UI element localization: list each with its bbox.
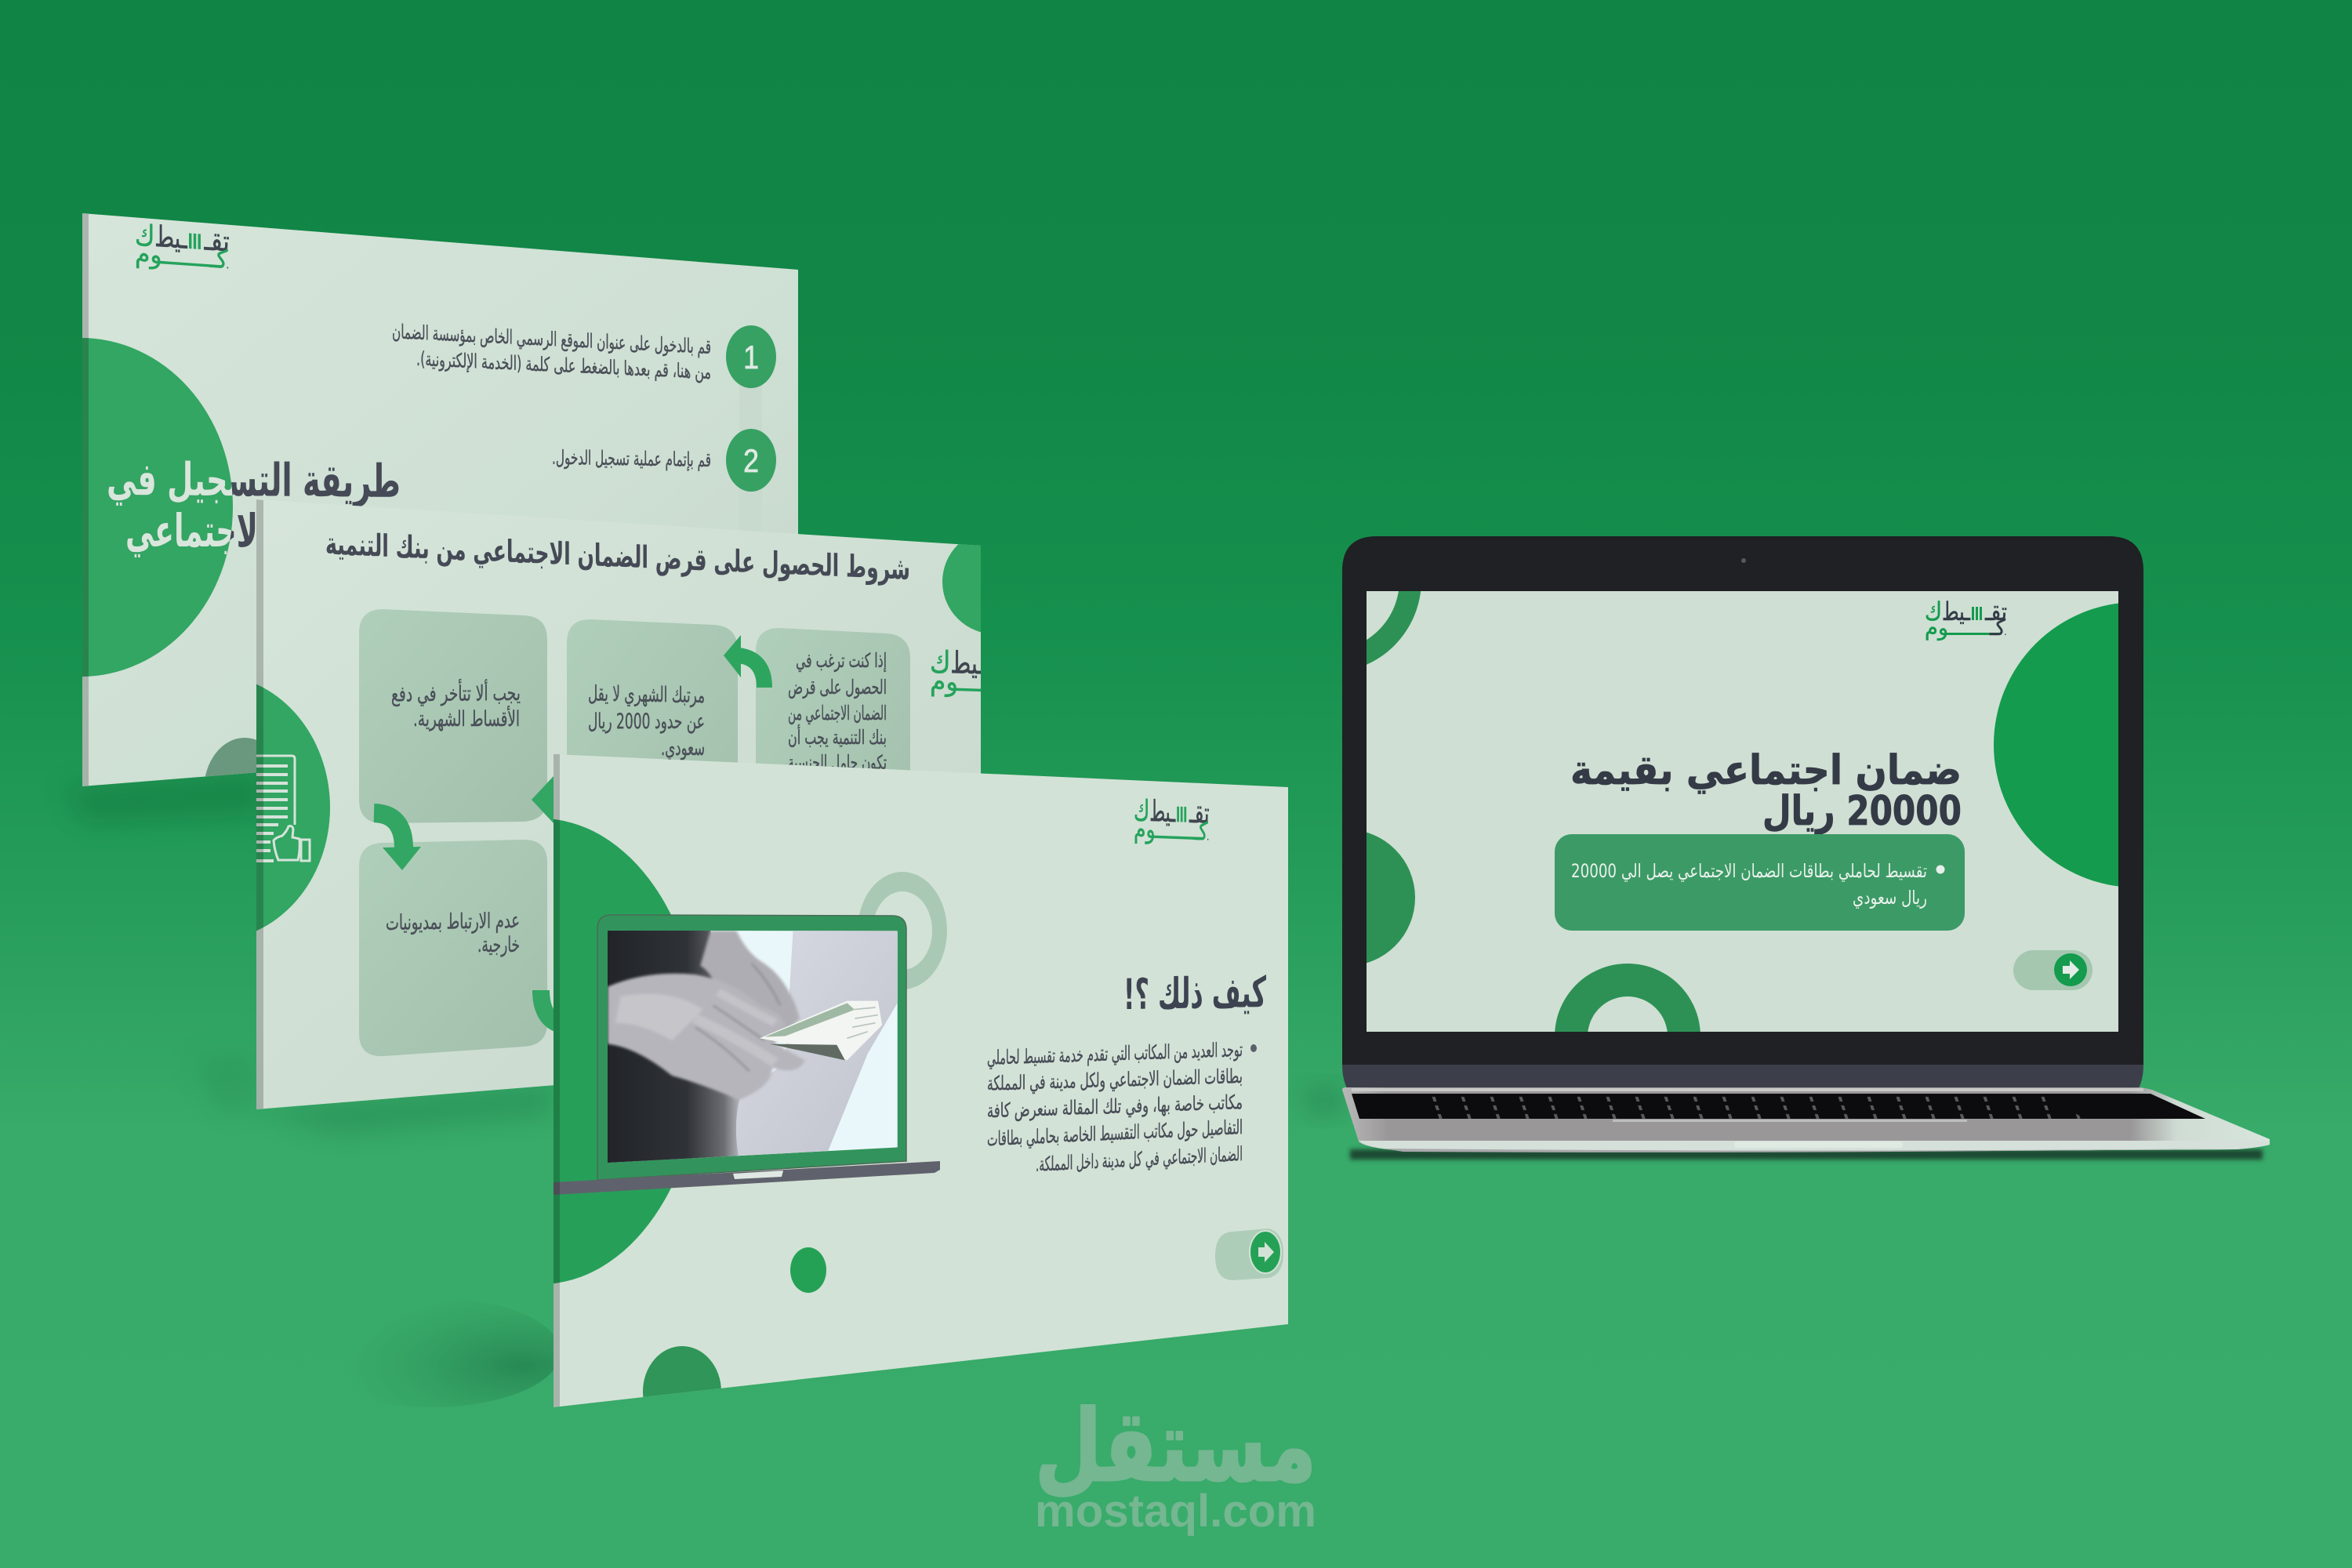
- shape: left circle: [1279, 829, 1415, 966]
- logo: ك: [1134, 793, 1149, 828]
- logo: ك: [135, 218, 154, 253]
- card: no debts: [359, 840, 547, 1056]
- slide 1 title: الضمان الاجتماعي: [125, 504, 381, 557]
- shape: left green circle: [554, 818, 671, 1284]
- card: eligibility: بنك التنمية يجب أن: [788, 724, 887, 749]
- step 1 text: من هنا، قم بعدها بالضغط على كلمة (الخدمة الإلكترونية).: [416, 347, 711, 384]
- shape: bottom ring: [1555, 964, 1700, 1109]
- logo: ـيط: [1942, 597, 1970, 626]
- hinge: [1342, 1065, 2143, 1088]
- laptop shadow: [1301, 1088, 2263, 1160]
- watermark: mostaql logo: مستقل: [1035, 1388, 1316, 1504]
- keyboard: [1352, 1094, 2205, 1119]
- logo: تقـ: [204, 223, 230, 259]
- logo: ـيط: [950, 645, 985, 682]
- laptop base: [1342, 1087, 2270, 1152]
- logo: تقـ: [1984, 597, 2007, 626]
- logo: .: [2004, 625, 2007, 637]
- shape: big green circle: [82, 338, 233, 677]
- logo: تقـ: [1189, 796, 1210, 830]
- shape: top left ring: [1236, 488, 1421, 673]
- card: eligibility: الضمان الاجتماعي من: [788, 702, 887, 724]
- slide 3 body text: الضمان الاجتماعي في كل مدينة داخل المملكة.: [1036, 1142, 1243, 1176]
- laptop base: [554, 1161, 940, 1195]
- card: eligibility: الحصول على قرض: [788, 676, 887, 699]
- shape: top right quarter circle: [942, 544, 981, 632]
- slide 3 title: كيف ذلك ؟!: [1123, 967, 1266, 1019]
- step 2 text: قم بإتمام عملية تسجيل الدخول.: [552, 446, 711, 472]
- logo: وم: [930, 666, 958, 698]
- logo: .: [226, 257, 230, 271]
- screen title: 20000 ريال: [1762, 788, 1962, 835]
- card: salary: [567, 619, 738, 762]
- card: late payment: [359, 609, 547, 823]
- card: no debts: خارجية.: [477, 933, 520, 957]
- step 2 number: 2: [743, 443, 759, 480]
- shape: left green circle: [256, 684, 330, 931]
- step 1 text: قم بالدخول على عنوان الموقع الرسمي الخاص بمؤسسة الضمان: [392, 320, 711, 359]
- step 2 number: [726, 429, 776, 492]
- panel: slide 2 conditions: [256, 499, 981, 1109]
- slide 3 body text: توجد العديد من المكاتب التي تقدم خدمة تقسيط لحاملي: [987, 1038, 1243, 1069]
- slide 3 body text: مكاتب خاصة بها، وفي تلك المقالة سنعرض كافة: [987, 1091, 1243, 1123]
- arrow: late payment to no debts: [374, 813, 421, 870]
- logo: كـ: [209, 244, 228, 274]
- callout box: [1555, 834, 1965, 931]
- card: eligibility: [756, 628, 910, 770]
- laptop screen: [1236, 488, 2279, 1109]
- logo: [931, 649, 981, 698]
- logo: تقـ: [1002, 647, 1029, 683]
- screen title: [1570, 747, 1962, 835]
- illustration: mini laptop with photo: [554, 915, 940, 1195]
- slide 2 title: شروط الحصول على قرض الضمان الاجتماعي من بنك التنمية: [325, 526, 910, 587]
- logo: [136, 223, 229, 270]
- card: salary: سعودي.: [661, 736, 705, 760]
- logo: ـيط: [1149, 794, 1176, 829]
- callout box: ريال سعودي: [1853, 887, 1927, 909]
- step 1 number: [726, 325, 776, 388]
- logo: [1134, 793, 1210, 846]
- camera: [1741, 558, 1746, 563]
- slide 3 body text: بطاقات الضمان الاجتماعي ولكل مدينة في المملكة: [987, 1065, 1243, 1096]
- callout box: تقسيط لحاملي بطاقات الضمان الاجتماعي يصل الي 20000: [1571, 860, 1927, 882]
- arrow: salary to late payment: [532, 776, 554, 823]
- logo: كـ: [1989, 615, 2006, 641]
- shape: grey circle: [205, 738, 256, 776]
- watermark: mostaql logo: mostaql.com: [1035, 1486, 1316, 1537]
- photo: hands counting money: [605, 928, 901, 1166]
- panel: slide 1 registration: [82, 213, 798, 786]
- screen title: ضمان اجتماعي بقيمة: [1570, 747, 1962, 794]
- toggle button with arrow: [2013, 950, 2092, 990]
- card: eligibility: إذا كنت ترغب في: [796, 649, 887, 673]
- slide 1 title: [107, 452, 401, 557]
- toggle button with arrow: [1215, 1229, 1283, 1280]
- shape: bottom circle: [643, 1346, 721, 1437]
- laptop bezel: [1342, 536, 2143, 1065]
- logo: ـيط: [154, 220, 188, 256]
- slide 1 title: الضمان الاجتماعي: [125, 504, 381, 557]
- logo: وم: [1925, 615, 1948, 641]
- panel: slide 3 how: [554, 754, 1288, 1407]
- shape: pale ring: [858, 872, 947, 989]
- step 1 text: [392, 320, 711, 384]
- icon: document with thumbs up: [256, 756, 310, 862]
- slide 3 body text: [987, 1038, 1243, 1176]
- shape: small green dot: [790, 1247, 826, 1293]
- shadows under slides: [63, 772, 561, 1407]
- card: no debts: عدم الارتباط بمديونيات: [386, 909, 520, 935]
- logo: كـ: [1193, 816, 1208, 846]
- bullet: [1250, 1044, 1257, 1052]
- card: salary: مرتبك الشهري لا يقل: [588, 681, 705, 708]
- watermark: mostaql logo: [1035, 1388, 1316, 1537]
- logo: ك: [1925, 597, 1942, 626]
- card: late payment: يجب ألا تتأخر في دفع: [391, 677, 521, 706]
- logo: .: [1207, 829, 1210, 844]
- arrow: eligibility to salary: [724, 635, 764, 688]
- slide 3 body text: التفاصيل حول مكاتب التقسيط الخاصة بحاملي بطاقات: [987, 1116, 1243, 1150]
- logo: ك: [930, 644, 950, 681]
- logo: وم: [1134, 814, 1156, 844]
- shape: right circle: [1994, 602, 2279, 887]
- arrow: lower arc: [541, 990, 558, 1024]
- slide 1 title: طريقة التسجيل في: [107, 452, 401, 509]
- card: eligibility: تكون حامل الجنسية: [788, 751, 887, 774]
- card: late payment: الأقساط الشهرية.: [413, 705, 520, 731]
- slide 1 title: طريقة التسجيل في: [107, 452, 401, 509]
- connector: dotted line between steps: [739, 384, 762, 541]
- card: salary: عن حدود 2000 ريال: [588, 710, 705, 734]
- logo: وم: [135, 238, 162, 270]
- laptop: [1236, 488, 2279, 1160]
- step 1 number: 1: [743, 339, 759, 376]
- logo: [1925, 597, 2007, 641]
